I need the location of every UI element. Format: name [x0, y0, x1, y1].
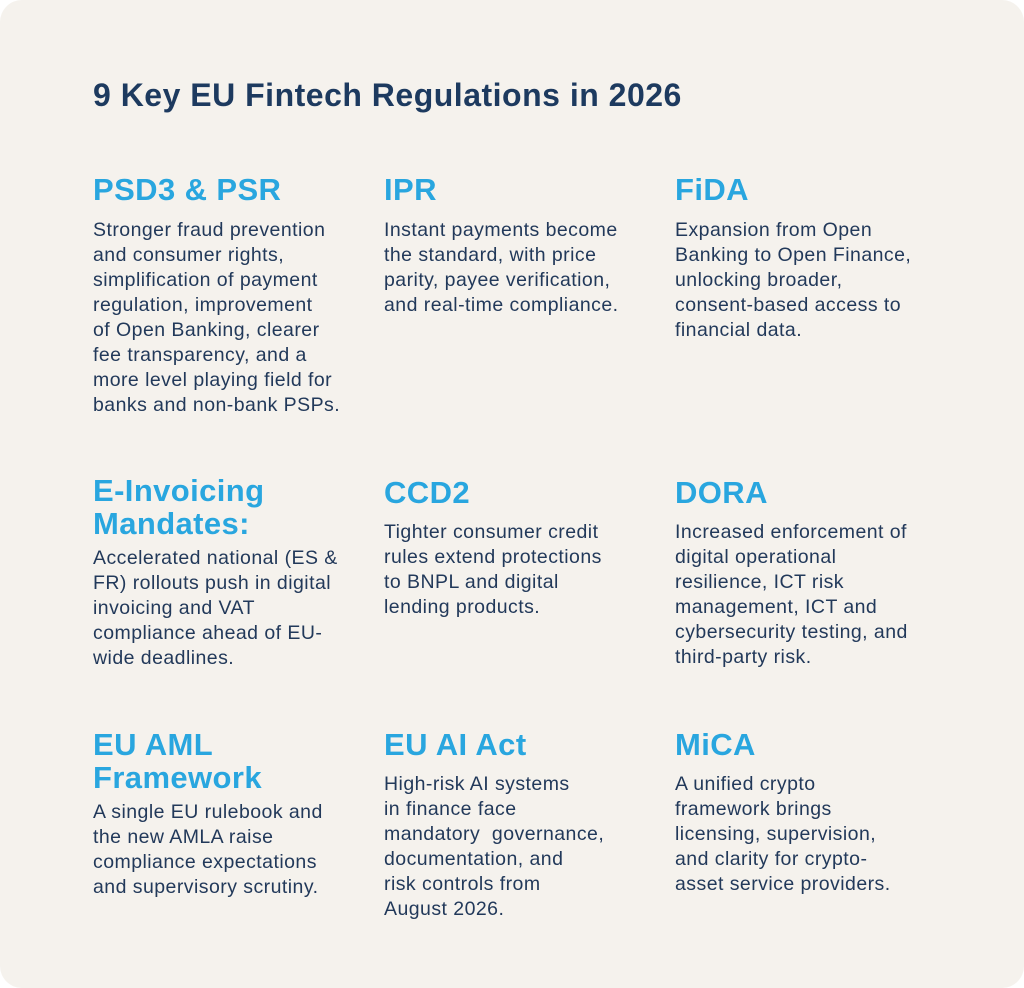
panel: FiDA: Expansion from Open [675, 219, 872, 241]
panel: EU AI Act: EU AI Act [384, 727, 527, 762]
panel: EU AI Act: August 2026. [384, 898, 504, 920]
panel: EU AI Act: in finance face [384, 798, 517, 820]
panel: FiDA [675, 172, 911, 341]
panel: PSD3 & PSR: Stronger fraud prevention [93, 219, 325, 241]
panel: CCD2: Tighter consumer credit [384, 521, 598, 543]
panel: MiCA: MiCA [675, 727, 756, 762]
panel: IPR: Instant payments become [384, 219, 618, 241]
panel: IPR: parity, payee verification, [384, 269, 610, 291]
panel: EU AML: Framework [93, 760, 262, 795]
panel: MiCA: licensing, supervision, [675, 823, 876, 845]
panel: IPR: the standard, with price [384, 244, 596, 266]
panel: DORA [675, 475, 908, 668]
panel: E-Invoicing [93, 473, 338, 669]
panel: EU AML: compliance expectations [93, 851, 317, 873]
panel: MiCA [675, 727, 891, 895]
panel: MiCA: and clarity for crypto- [675, 848, 867, 870]
panel: EU AML: A single EU rulebook and [93, 801, 323, 823]
panel: PSD3 & PSR: more level playing field for [93, 369, 332, 391]
panel: PSD3 & PSR: PSD3 & PSR [93, 172, 281, 207]
panel: CCD2: rules extend protections [384, 546, 602, 568]
panel: E-Invoicing: E-Invoicing [93, 473, 264, 508]
panel: CCD2: lending products. [384, 596, 540, 618]
panel: DORA: Increased enforcement of [675, 521, 907, 543]
panel: EU AI Act [384, 727, 604, 920]
panel: PSD3 & PSR: fee transparency, and a [93, 344, 307, 366]
panel: E-Invoicing: wide deadlines. [93, 647, 234, 669]
title: 9 Key EU Fintech Regulations in 2026 [93, 77, 682, 113]
panel: PSD3 & PSR [93, 172, 340, 416]
panel: EU AI Act: risk controls from [384, 873, 541, 895]
panel: DORA: digital operational [675, 546, 836, 568]
panel: EU AI Act: mandatory governance, [384, 823, 604, 845]
panel: FiDA: unlocking broader, [675, 269, 842, 291]
panel: E-Invoicing: FR) rollouts push in digital [93, 572, 331, 594]
panel: IPR: IPR [384, 172, 437, 207]
panel: EU AML: the new AMLA raise [93, 826, 273, 848]
panel: DORA: third-party risk. [675, 646, 812, 668]
panel: IPR [384, 172, 619, 316]
panel: CCD2: to BNPL and digital [384, 571, 559, 593]
panel: DORA: cybersecurity testing, and [675, 621, 908, 643]
panel: FiDA: FiDA [675, 172, 749, 207]
panel: E-Invoicing: Mandates: [93, 506, 250, 541]
panel: MiCA: framework brings [675, 798, 832, 820]
panel: EU AML: EU AML [93, 727, 213, 762]
panel: EU AI Act: High-risk AI systems [384, 773, 570, 795]
panel: E-Invoicing: invoicing and VAT [93, 597, 255, 619]
panel: CCD2: CCD2 [384, 475, 470, 510]
panel: FiDA: Banking to Open Finance, [675, 244, 911, 266]
panel: DORA: DORA [675, 475, 768, 510]
panel: PSD3 & PSR: simplification of payment [93, 269, 318, 291]
panel: PSD3 & PSR: banks and non-bank PSPs. [93, 394, 340, 416]
panel: EU AML: and supervisory scrutiny. [93, 876, 318, 898]
panel: E-Invoicing: Accelerated national (ES & [93, 547, 338, 569]
panel: PSD3 & PSR: regulation, improvement [93, 294, 313, 316]
panel: EU AML [93, 727, 323, 898]
panel: EU AI Act: documentation, and [384, 848, 563, 870]
panel: E-Invoicing: compliance ahead of EU- [93, 622, 322, 644]
panel: CCD2 [384, 475, 602, 618]
panel: FiDA: financial data. [675, 319, 802, 341]
panel: PSD3 & PSR: of Open Banking, clearer [93, 319, 320, 341]
panel: FiDA: consent-based access to [675, 294, 901, 316]
panel: PSD3 & PSR: and consumer rights, [93, 244, 284, 266]
panel: DORA: management, ICT and [675, 596, 877, 618]
panel: IPR: and real-time compliance. [384, 294, 619, 316]
panel: DORA: resilience, ICT risk [675, 571, 844, 593]
panel: MiCA: asset service providers. [675, 873, 891, 895]
panel: MiCA: A unified crypto [675, 773, 816, 795]
